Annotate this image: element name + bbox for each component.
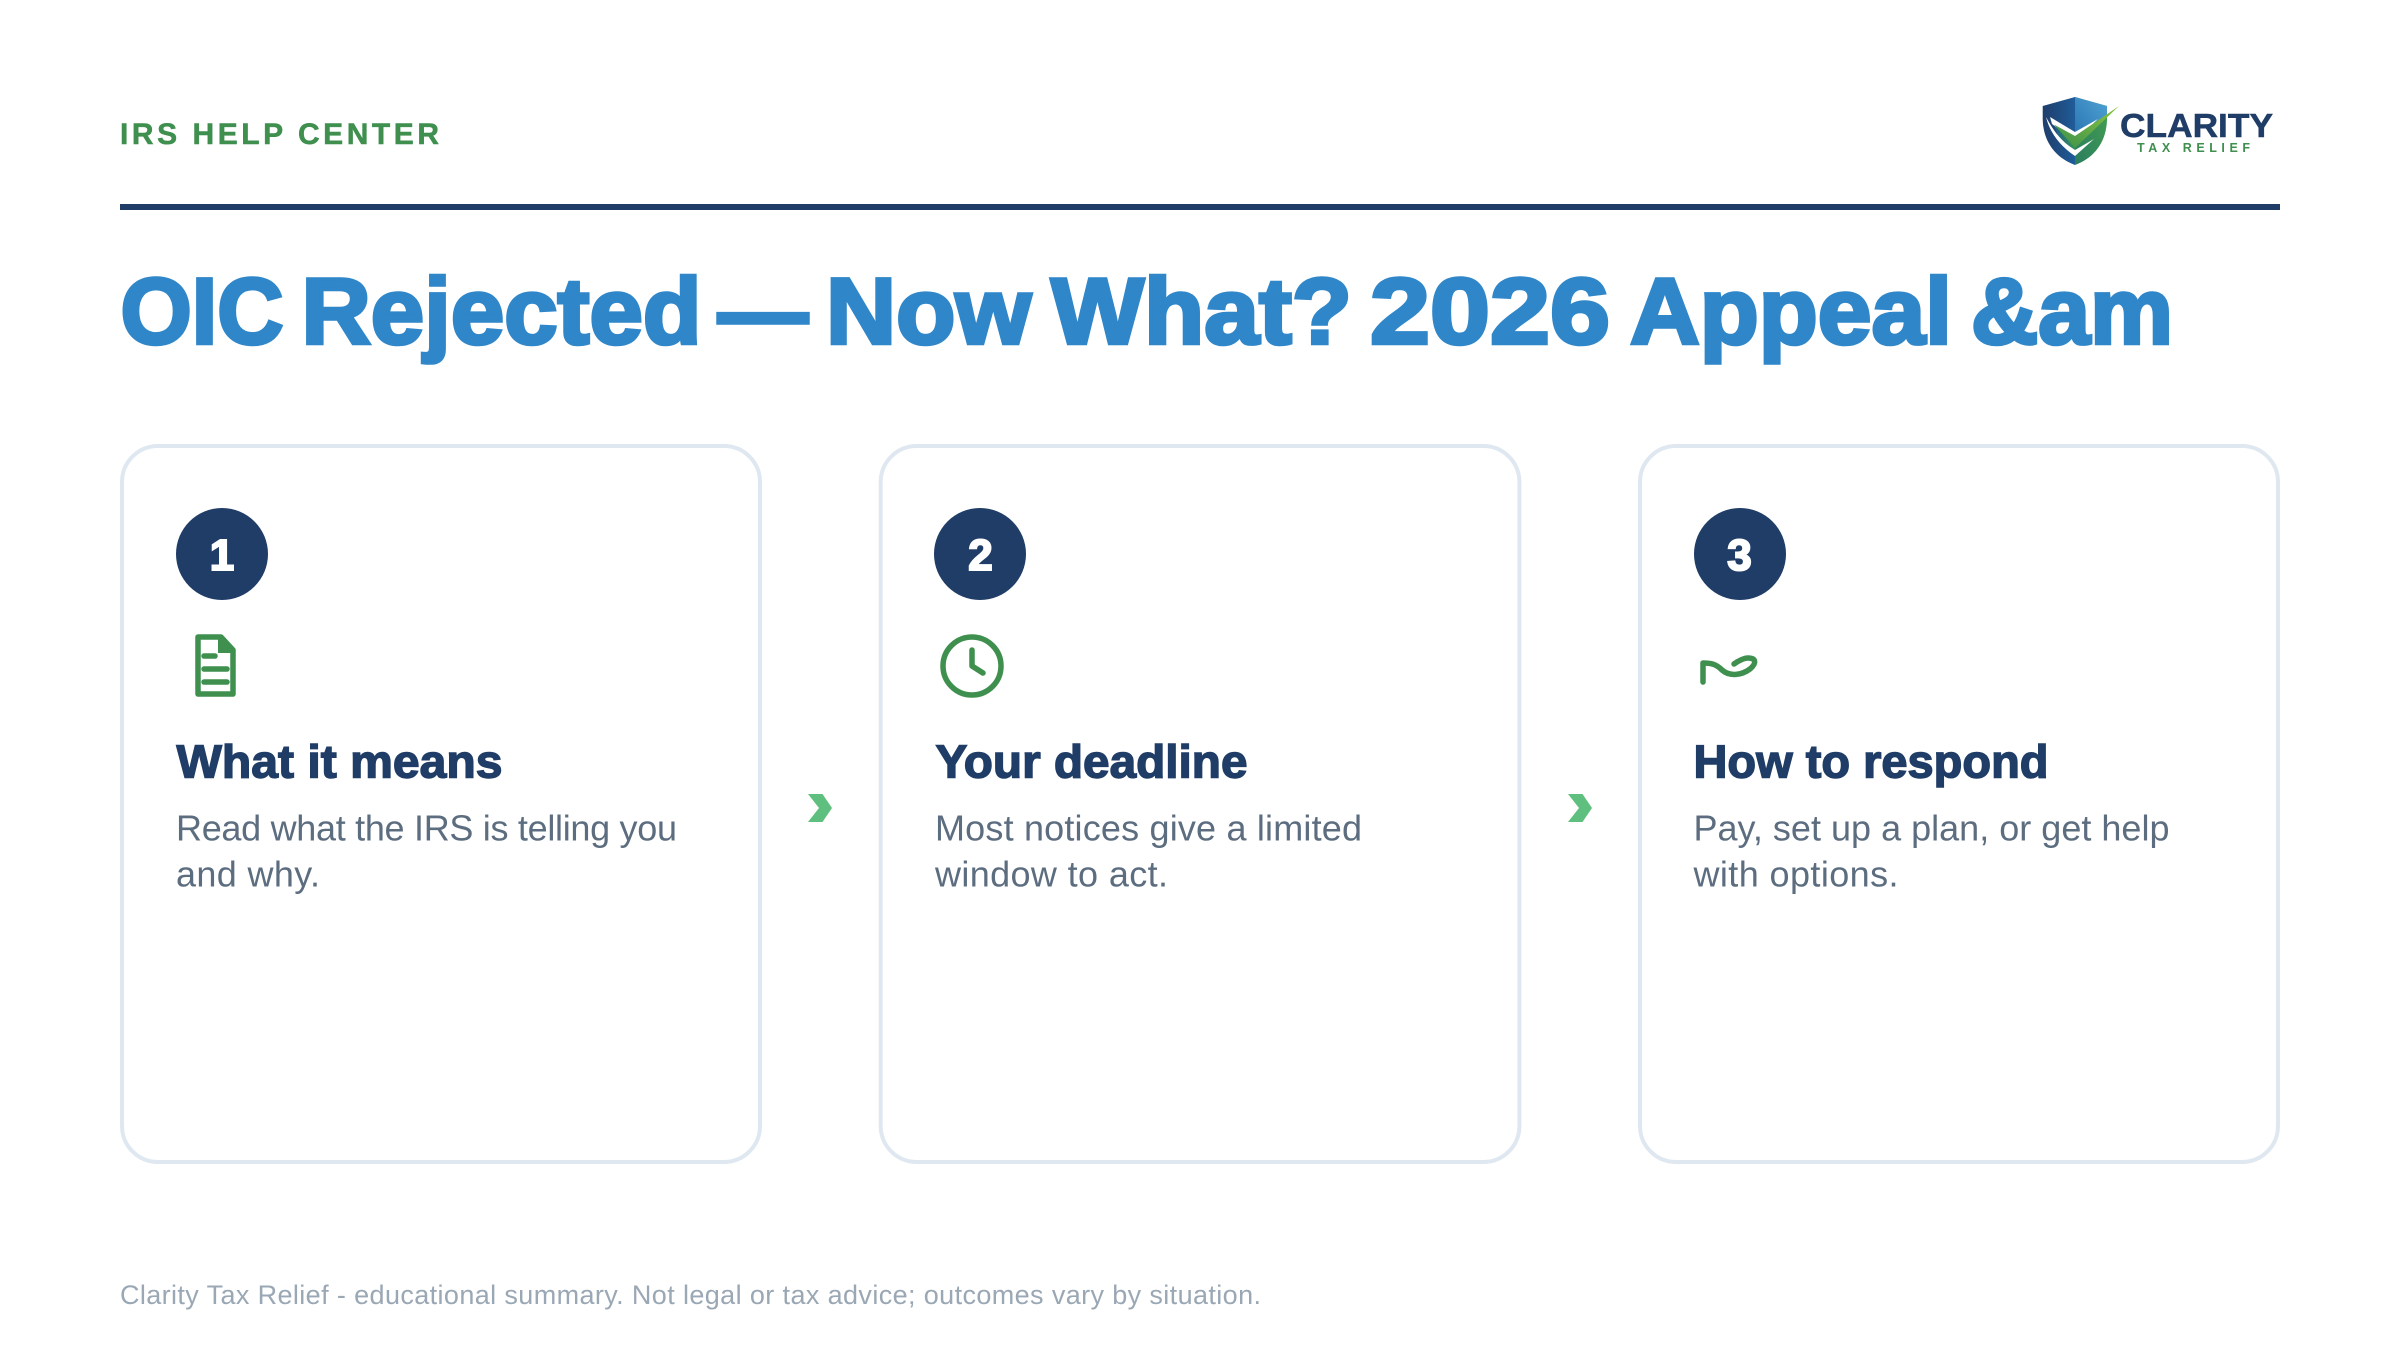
card outline	[1640, 446, 2278, 1162]
icon: handshake squiggle	[1703, 658, 1755, 682]
body text: with options.	[1692, 854, 1898, 894]
panel: step 3 How to respond	[1640, 446, 2278, 1162]
panel: step 2 Your deadline	[881, 446, 1519, 1162]
body text: Pay, set up a plan, or get help	[1694, 808, 2170, 848]
title: Now	[826, 258, 1032, 364]
card outline	[881, 446, 1519, 1162]
card outline	[122, 446, 760, 1162]
number badge 3: 3	[1727, 531, 1752, 580]
title: What?	[1051, 258, 1352, 364]
number badge 1: 1	[210, 531, 234, 580]
tagline: TAX RELIEF	[2137, 141, 2250, 155]
number badge 2: 2	[968, 531, 993, 580]
number badge 1	[176, 508, 268, 600]
wordmark: CLARITY	[2120, 107, 2273, 144]
title: &am	[1971, 258, 2173, 364]
title: —	[718, 258, 808, 364]
body text: Read what the IRS is telling you	[176, 808, 677, 848]
body text	[934, 808, 1362, 894]
number badge 2	[934, 508, 1026, 600]
arrow: step 2 to 3	[1568, 794, 1592, 822]
arrow: step 1 to 2	[808, 794, 832, 822]
body text: and why.	[176, 854, 320, 894]
body text: Most notices give a limited	[935, 808, 1362, 848]
heading: Your deadline	[936, 736, 1248, 788]
heading: How to respond	[1694, 736, 2048, 788]
title: Rejected	[302, 258, 702, 364]
header rule	[120, 204, 2280, 210]
title: 2026	[1370, 258, 1610, 364]
title: OIC	[120, 258, 284, 364]
number badge 3	[1694, 508, 1786, 600]
icon: clock	[943, 637, 1001, 695]
footer disclaimer: Clarity Tax Relief - educational summary. Not legal or tax advice; outcomes vary by situation.	[120, 1280, 1261, 1310]
heading: What it means	[176, 736, 502, 788]
icon: document	[198, 636, 235, 694]
panel: step 1 What it means	[122, 446, 760, 1162]
logo: Clarity Tax Relief	[2043, 97, 2273, 165]
title	[120, 258, 2173, 364]
title: Appeal	[1630, 258, 1952, 364]
body text	[1692, 808, 2170, 894]
shield mark	[2043, 97, 2119, 165]
eyebrow: IRS Help Center: IRS HELP CENTER	[120, 118, 439, 151]
body text: window to act.	[934, 854, 1168, 894]
body text	[176, 808, 677, 894]
